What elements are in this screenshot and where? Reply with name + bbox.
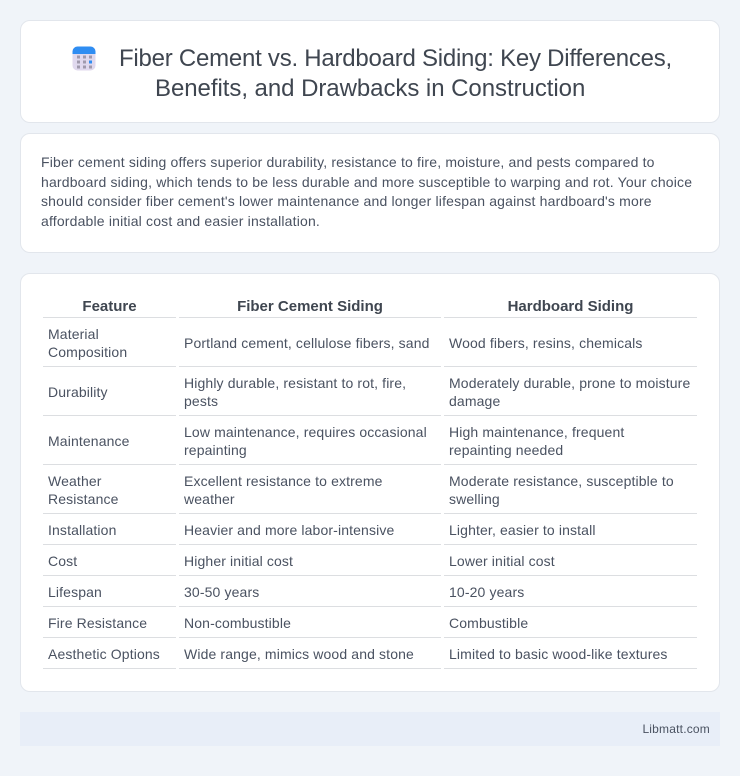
row: Cost: Cost: [48, 553, 77, 569]
comparison table: High maintenance, frequent: [449, 424, 624, 440]
comparison table: weather: [184, 491, 235, 507]
intro panel: [20, 133, 720, 253]
intro text: affordable initial cost and easier installation.: [41, 213, 320, 229]
header: Hardboard Siding: Hardboard Siding: [508, 298, 633, 315]
row: Lifespan: Lifespan: [48, 584, 102, 600]
title: Benefits, and Drawbacks in Construction: [155, 75, 585, 102]
comparison table: damage: [449, 393, 500, 409]
row: Material Composition: Composition: [48, 344, 127, 360]
comparison table panel: [20, 273, 720, 692]
comparison table: Higher initial cost: [184, 553, 293, 569]
comparison table: Portland cement, cellulose fibers, sand: [184, 335, 430, 351]
comparison table: Combustible: [449, 615, 528, 631]
intro text: [41, 154, 692, 229]
comparison table: Lighter, easier to install: [449, 522, 596, 538]
header: Fiber Cement Siding: Fiber Cement Siding: [237, 298, 383, 315]
intro text: should consider fiber cement's lower maintenance and longer lifespan against hardboard's more: [41, 193, 652, 209]
comparison table: Highly durable, resistant to rot, fire,: [184, 375, 406, 391]
row: Material Composition: [48, 326, 127, 360]
comparison table: repainting needed: [449, 442, 563, 458]
comparison table: 10-20 years: [449, 584, 524, 600]
comparison table: Non-combustible: [184, 615, 291, 631]
comparison table: Limited to basic wood-like textures: [449, 646, 668, 662]
intro text: hardboard siding, which tends to be less durable and more susceptible to warping and rot. Your choice: [41, 174, 692, 190]
row: Fire Resistance: Fire Resistance: [48, 615, 147, 631]
title: [119, 45, 672, 102]
title: Fiber Cement vs. Hardboard Siding: Key Differences,: [119, 45, 672, 72]
comparison table: 30-50 years: [184, 584, 259, 600]
row: Material Composition: Material: [48, 326, 99, 342]
comparison table: swelling: [449, 491, 500, 507]
footer text: Libmatt.com: [642, 722, 710, 736]
comparison table: Wood fibers, resins, chemicals: [449, 335, 642, 351]
row: Maintenance: Maintenance: [48, 433, 130, 449]
footer bar: [20, 712, 720, 746]
comparison table: Wide range, mimics wood and stone: [184, 646, 414, 662]
icon: calendar: [72, 46, 96, 70]
header: Feature: Feature: [82, 298, 137, 315]
comparison table: Moderately durable, prone to moisture: [449, 375, 690, 391]
comparison table: Moderate resistance, susceptible to: [449, 473, 674, 489]
row: Aesthetic Options: Aesthetic Options: [48, 646, 160, 662]
comparison table: Heavier and more labor-intensive: [184, 522, 394, 538]
intro text: Fiber cement siding offers superior durability, resistance to fire, moisture, and pests compared to: [41, 154, 655, 170]
comparison table: pests: [184, 393, 218, 409]
comparison table: Excellent resistance to extreme: [184, 473, 383, 489]
row: Weather Resistance: [48, 473, 119, 507]
comparison table: Lower initial cost: [449, 553, 555, 569]
comparison table: repainting: [184, 442, 247, 458]
row: Installation: Installation: [48, 522, 116, 538]
row: Weather Resistance: Resistance: [48, 491, 119, 507]
title card: [20, 20, 720, 123]
row: Weather Resistance: Weather: [48, 473, 102, 489]
comparison table: Low maintenance, requires occasional: [184, 424, 427, 440]
row: Durability: Durability: [48, 384, 108, 400]
